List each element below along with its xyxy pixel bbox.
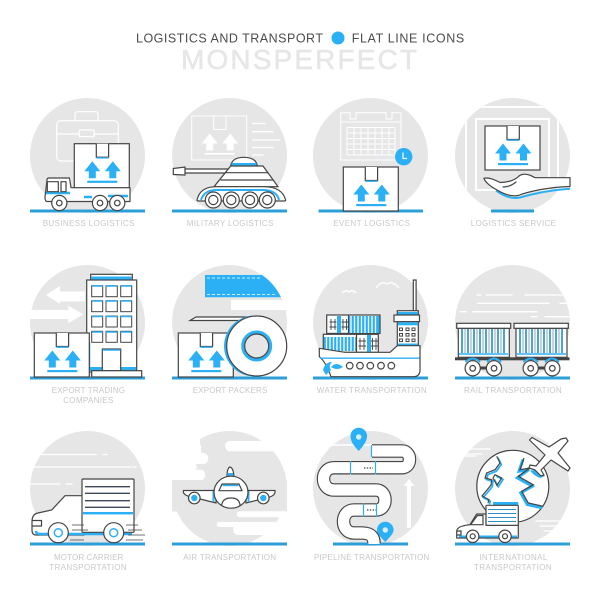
label [52,386,125,405]
label: WATER TRANSPORTATION [317,386,427,395]
speed lines [460,295,569,317]
icon: tank [173,157,286,208]
icon: ship [319,280,420,377]
icon: delivery truck [457,502,518,542]
header title: FLAT LINE ICONS [352,32,464,46]
label: AIR TRANSPORTATION [183,553,276,562]
tape strip [205,275,281,297]
icon: pipeline [324,445,410,544]
label: EXPORT TRADING [52,386,125,395]
icon: hand [484,174,570,198]
label: COMPANIES [63,396,113,405]
icon: location pin bottom [377,522,394,542]
panel: business logistics [30,98,145,228]
label: TRANSPORTATION [49,563,127,572]
icon: box [485,126,540,170]
panel: rail transportation [455,265,570,395]
label: EVENT LOGISTICS [333,219,410,228]
icon: train wagons [455,323,570,376]
label: RAIL TRANSPORTATION [464,386,562,395]
icon: location pin top [350,428,367,451]
icon: box [34,333,89,377]
panel: export trading companies [30,265,145,405]
panel: export packers [172,265,290,395]
icon: clock [395,148,412,165]
icon: truck [45,144,130,211]
icon: box [178,333,233,377]
label [474,553,552,572]
label: INTERNATIONAL [479,553,548,562]
icon: airplane [529,438,570,478]
arrow [404,479,414,528]
header title: LOGISTICS AND TRANSPORT [136,32,323,46]
icon: building [87,274,142,377]
icon: tape roll [224,316,287,376]
white strip [231,300,290,310]
label: BUSINESS LOGISTICS [43,219,134,228]
label: LOGISTICS SERVICE [471,219,556,228]
panel: military logistics [172,98,287,228]
watermark heading: MONSPERFECT [181,44,417,75]
icon: globe [477,450,549,522]
speed lines [252,124,280,155]
label: EXPORT PACKERS [193,386,267,395]
speed lines [30,454,136,484]
icon: calendar [341,113,401,160]
panel: international transportation [455,431,570,572]
icon: motor truck [32,479,145,543]
panel: motor carrier transportation [30,431,145,572]
clouds [165,428,300,535]
panel: air transportation [165,428,300,562]
icon: box [343,167,398,211]
panel: event logistics [313,98,428,228]
label: TRANSPORTATION [474,563,552,572]
header title [136,32,464,46]
icon: faded box [192,116,247,160]
faded frame [465,106,559,192]
panel: pipeline transportation [313,428,430,562]
label: MOTOR CARRIER [54,553,124,562]
label [49,553,127,572]
birds [342,283,399,293]
panel: water transportation [313,265,428,395]
panel: logistics service [455,98,571,226]
icon: briefcase [57,112,118,161]
label: MILITARY LOGISTICS [187,219,273,228]
icon: airplane [183,467,275,508]
arrows [30,286,85,323]
label: PIPELINE TRANSPORTATION [314,553,430,562]
